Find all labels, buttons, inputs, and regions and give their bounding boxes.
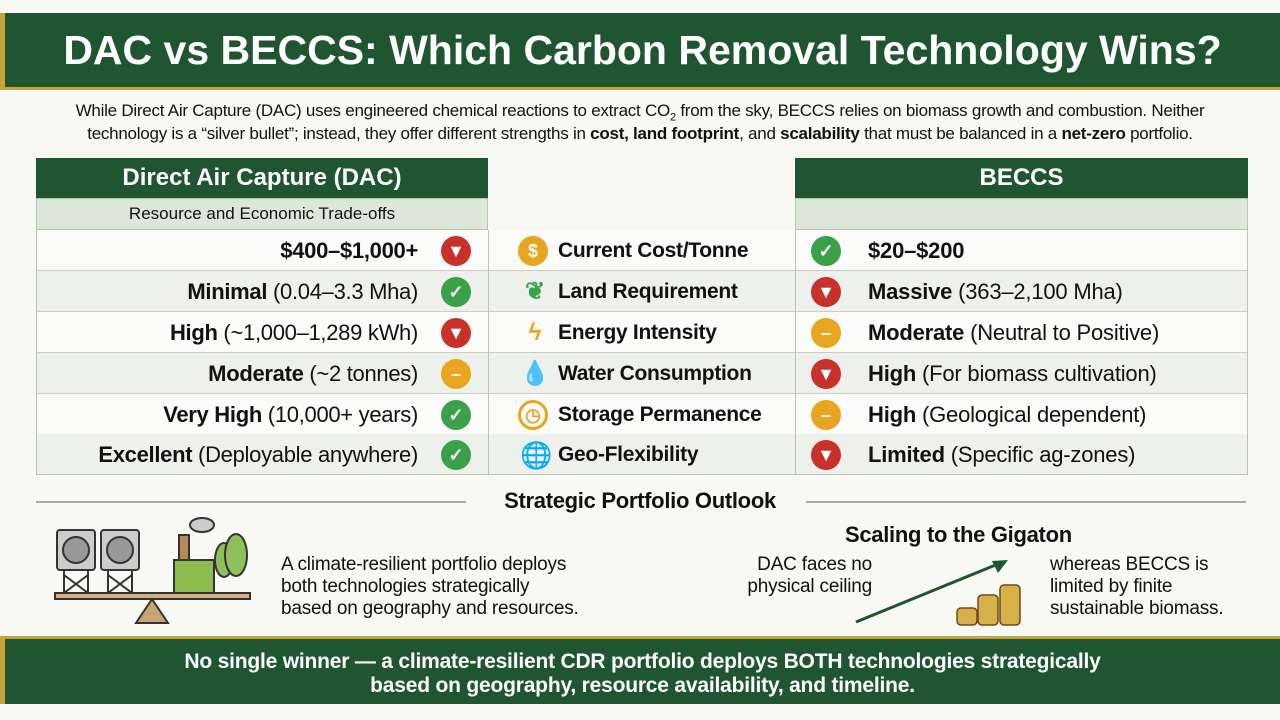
row: water: High (For biomass cultivation)	[868, 361, 1157, 386]
intro text: technology is a “silver bullet”; instead, they offer different strengths in cost, land footprint, and scalability that must be balanced in a net-zero portfolio.	[87, 124, 1193, 143]
text: portfolio: both technologies strategically	[281, 576, 529, 597]
text: portfolio: based on geography and resources.	[281, 598, 579, 619]
icon: coins	[956, 584, 1021, 626]
title banner	[0, 13, 1280, 90]
row: energy: ϟ	[529, 319, 541, 346]
row: water: ▼	[817, 364, 835, 384]
row: water	[36, 353, 1248, 394]
row: water: Moderate (~2 tonnes)	[208, 361, 418, 386]
row: cost: $	[528, 241, 538, 261]
row: land: ▼	[817, 282, 835, 302]
row: energy: Energy Intensity	[558, 321, 717, 344]
footer banner: No single winner — a climate-resilient CDR portfolio deploys BOTH technologies strategically	[184, 650, 1101, 673]
row: permanence: Very High (10,000+ years)	[163, 402, 418, 427]
table: comparison	[36, 158, 1248, 230]
row: land: Land Requirement	[558, 280, 738, 303]
row: energy: High (~1,000–1,289 kWh)	[170, 320, 418, 345]
arrow: growth	[856, 560, 1008, 624]
row: permanence: –	[821, 405, 831, 425]
row: geo: Excellent (Deployable anywhere)	[98, 442, 418, 467]
row: energy: ▼	[447, 323, 465, 343]
row: geo: ✓	[448, 445, 464, 465]
footer banner	[0, 636, 1280, 704]
row: permanence	[36, 394, 1248, 435]
text: portfolio: A climate-resilient portfolio deploys	[281, 554, 566, 575]
row: geo	[36, 434, 1248, 475]
row: land	[36, 271, 1248, 312]
title banner: DAC vs BECCS: Which Carbon Removal Technology Wins?	[63, 27, 1222, 73]
subheader	[36, 198, 488, 230]
row: water: –	[451, 364, 461, 384]
row: geo: ▼	[817, 445, 835, 465]
subheader: Resource and Economic Trade-offs	[129, 204, 395, 223]
row: geo: Geo-Flexibility	[558, 443, 698, 466]
text: portfolio	[281, 554, 579, 619]
text: BECCS limited: limited by finite	[1050, 576, 1172, 597]
DAC header	[36, 158, 488, 198]
row: cost: $400–$1,000+	[280, 238, 418, 263]
text: DAC ceiling	[747, 554, 872, 597]
row: cost: $20–$200	[868, 238, 964, 263]
row: cost: ▼	[447, 241, 465, 261]
row: energy: Moderate (Neutral to Positive)	[868, 320, 1159, 345]
row: geo: 🌐	[520, 440, 552, 470]
row: land: ✓	[448, 282, 464, 302]
row: water: 💧	[520, 360, 550, 387]
row: geo: Limited (Specific ag-zones)	[868, 442, 1135, 467]
text: BECCS limited: sustainable biomass.	[1050, 598, 1223, 619]
DAC header: Direct Air Capture (DAC)	[122, 164, 402, 191]
text: BECCS limited: whereas BECCS is	[1050, 554, 1208, 575]
row: land: Massive (363–2,100 Mha)	[868, 279, 1123, 304]
row: cost: Current Cost/Tonne	[558, 239, 748, 262]
scaling heading: Scaling to the Gigaton	[845, 522, 1072, 547]
section heading: Strategic Portfolio Outlook	[504, 488, 776, 513]
row: permanence: Storage Permanence	[558, 403, 762, 426]
row: permanence: ◷	[525, 405, 541, 425]
row: water: Water Consumption	[558, 362, 752, 385]
text: BECCS limited	[1050, 554, 1223, 619]
row: energy: –	[821, 323, 831, 343]
row: cost	[36, 230, 1248, 271]
row: land: Minimal (0.04–3.3 Mha)	[187, 279, 418, 304]
icon: balance scale	[54, 517, 251, 624]
text: DAC ceiling: physical ceiling	[747, 576, 872, 597]
footer banner: based on geography, resource availability, and timeline.	[370, 674, 915, 697]
row: permanence: High (Geological dependent)	[868, 402, 1146, 427]
row: energy	[36, 312, 1248, 353]
row: land: ❦	[525, 278, 545, 305]
row: permanence: ✓	[448, 405, 464, 425]
intro text	[76, 101, 1204, 143]
BECCS header: BECCS	[979, 164, 1064, 191]
text: DAC ceiling: DAC faces no	[757, 554, 872, 575]
row: cost: ✓	[818, 241, 834, 261]
intro text: While Direct Air Capture (DAC) uses engineered chemical reactions to extract CO2 from the sky, BECCS relies on biomass growth and combustion. Neither	[76, 101, 1204, 123]
BECCS header	[795, 158, 1248, 198]
